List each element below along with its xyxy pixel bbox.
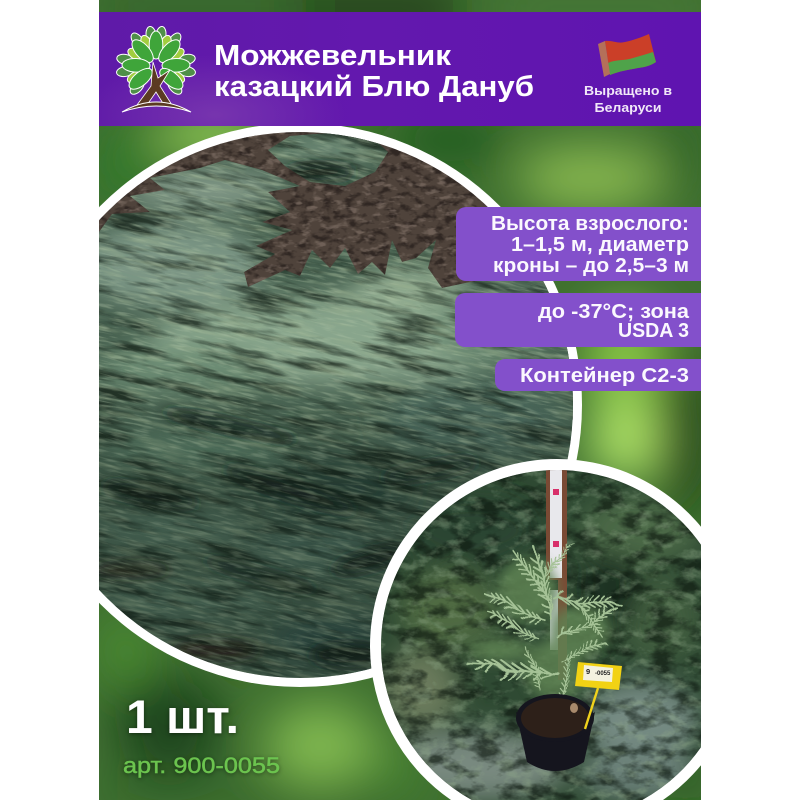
yellow plant label: -0055 [595, 671, 611, 677]
black pot [516, 694, 595, 771]
caption: grown in Belarus: Выращено в [584, 83, 672, 98]
title: казацкий Блю Дануб [214, 71, 534, 103]
icon: flag of Belarus [598, 34, 656, 77]
yellow plant label [575, 662, 622, 729]
sapling foliage [468, 537, 620, 700]
dark shadow streaks [90, 164, 500, 667]
white ring of main photo [99, 126, 582, 687]
infographic canvas [99, 0, 701, 800]
info pill: size: кроны – до 2,5–3 м [493, 254, 689, 277]
title: Можжевельник [214, 40, 452, 72]
icon: tree logo [116, 26, 196, 112]
info pill: size [456, 207, 701, 281]
small photo content [381, 470, 701, 800]
header band [99, 12, 701, 126]
measuring pole [546, 470, 567, 680]
info pill: hardiness: USDA 3 [618, 319, 689, 342]
caption: grown in Belarus: Беларуси [594, 100, 662, 115]
blurred green background [99, 0, 701, 800]
yellow plant label: 9 [586, 667, 590, 676]
info pill: container [495, 359, 701, 391]
info pill: hardiness [455, 293, 701, 347]
info pill: size: Высота взрослого: [491, 212, 689, 235]
quantity label: 1 шт. [126, 690, 239, 743]
mulch ground [99, 132, 573, 420]
info pill: size: 1–1,5 м, диаметр [511, 233, 689, 256]
article number: арт. 900-0055 [123, 753, 280, 778]
caption: grown in Belarus [584, 86, 672, 114]
photo circle: juniper bed [8, 88, 624, 729]
main photo content [8, 88, 624, 729]
info pill: hardiness: до -37°C; зона [538, 300, 690, 323]
spruce branch texture [381, 470, 701, 800]
title [216, 45, 533, 102]
white ring of small photo [370, 459, 701, 800]
info pill: container: Контейнер С2-3 [520, 364, 689, 387]
photo circle: potted sapling [370, 459, 701, 800]
foliage needle texture [99, 133, 573, 678]
juniper foliage [8, 88, 624, 729]
